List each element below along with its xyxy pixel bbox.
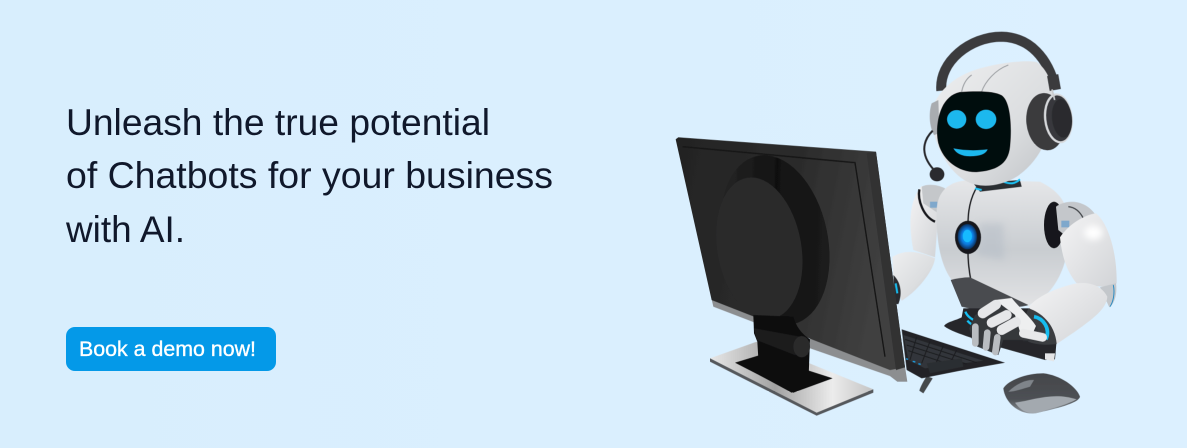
monitor silver edge [712,299,907,382]
headset band [941,37,1055,91]
neck [973,179,1022,192]
computer monitor [676,137,907,416]
monitor stand base [710,342,873,416]
robot hand [969,298,1043,355]
head [930,61,1054,186]
headline: with AI. [65,208,185,250]
right forearm [1018,283,1107,345]
lower finger segments [975,327,997,352]
keyboard [902,329,1005,393]
computer mouse [1003,373,1080,413]
monitor back panel [676,137,905,370]
headset microphone [924,131,944,181]
monitor neck [753,315,810,393]
left arm [893,185,945,304]
headline [65,101,553,250]
rear mount disc [706,145,844,335]
right arm [1044,202,1117,307]
headphone earcup [1023,74,1075,152]
button: book a demo [66,327,276,371]
robot at computer illustration [893,37,1117,413]
button: book a demo: Book a demo now! [79,337,256,361]
fingers [983,305,1016,330]
eyes [947,110,996,129]
chest light [955,221,981,254]
headline: of Chatbots for your business [66,154,553,196]
torso [937,180,1069,306]
face screen [937,91,1011,172]
mouth [953,148,988,156]
pelvis and desk base [944,277,1057,361]
headline: Unleash the true potential [66,101,490,143]
